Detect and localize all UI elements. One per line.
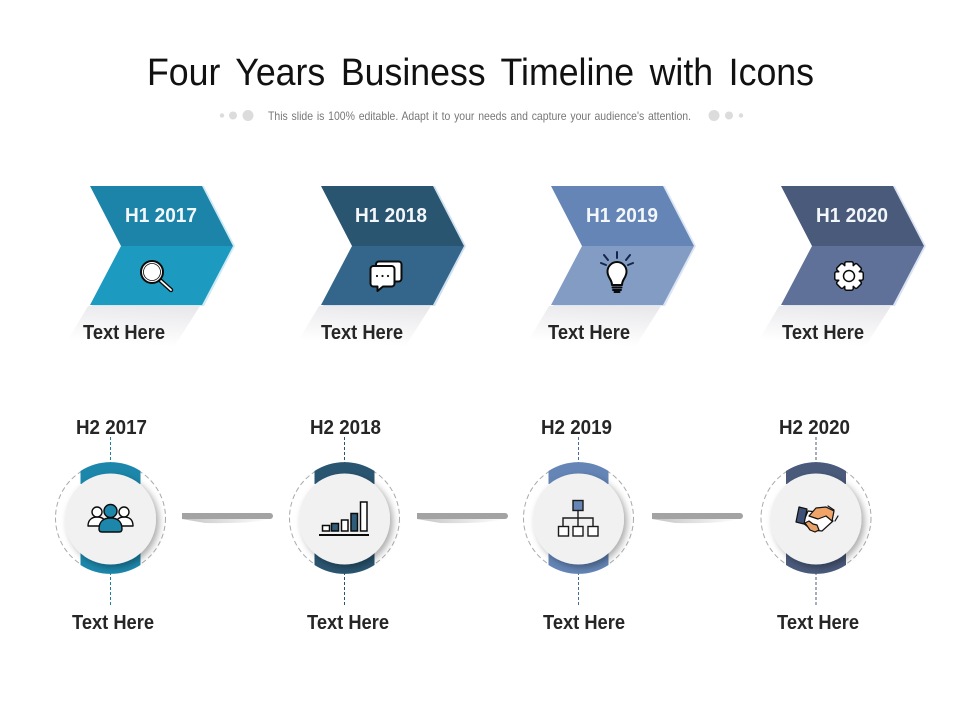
text here: Text Here <box>548 322 630 344</box>
left dots <box>220 110 254 121</box>
arrow 2 <box>417 513 508 523</box>
chevron bottom <box>321 246 464 305</box>
icon: people <box>88 504 133 532</box>
icon: bar chart <box>319 502 369 535</box>
right dots <box>708 110 743 121</box>
arrow 3 <box>652 513 743 523</box>
chevron top <box>90 186 233 246</box>
arrow 1 <box>182 513 273 523</box>
heading: H2 2017 <box>76 417 147 439</box>
heading: H2 2018 <box>310 417 381 439</box>
panel: H1 2019 chevron <box>523 186 696 350</box>
panel: H2 2019 milestone <box>524 417 634 634</box>
chevron top <box>321 186 464 246</box>
chevron bottom <box>551 246 694 305</box>
text here: Text Here <box>777 612 859 634</box>
icon: org chart <box>558 500 598 536</box>
text here: Text Here <box>72 612 154 634</box>
subtitle with dots <box>220 109 743 123</box>
text here: Text Here <box>782 322 864 344</box>
panel: H1 2017 chevron <box>62 186 235 350</box>
text here: Text Here <box>83 322 165 344</box>
heading: H2 2020 <box>779 417 850 439</box>
panel: H1 2020 chevron <box>753 186 926 350</box>
panel: H2 2020 milestone <box>761 417 871 634</box>
text here: Text Here <box>307 612 389 634</box>
title: Four Years Business Timeline with Icons <box>147 52 814 94</box>
heading: H2 2019 <box>541 417 612 439</box>
label H1 2019: H1 2019 <box>586 205 658 227</box>
chevron top <box>781 186 924 246</box>
chevron top <box>551 186 694 246</box>
icon: gear <box>836 262 862 290</box>
chevron bottom <box>781 246 924 305</box>
label H1 2020: H1 2020 <box>816 205 888 227</box>
icon: magnifier <box>141 261 171 290</box>
panel: H2 2018 milestone <box>290 417 400 634</box>
subtitle text: This slide is 100% editable. Adapt it to your needs and capture your audience's attention. <box>268 109 691 123</box>
text here: Text Here <box>543 612 625 634</box>
panel: H1 2018 chevron <box>293 186 466 350</box>
chevron bottom <box>90 246 233 305</box>
text here: Text Here <box>321 322 403 344</box>
panel: H2 2017 milestone <box>56 417 166 634</box>
icon: light bulb <box>601 252 633 292</box>
icon: chat bubbles <box>370 262 402 291</box>
label H1 2017: H1 2017 <box>125 205 197 227</box>
icon: handshake <box>796 506 838 532</box>
label H1 2018: H1 2018 <box>355 205 427 227</box>
